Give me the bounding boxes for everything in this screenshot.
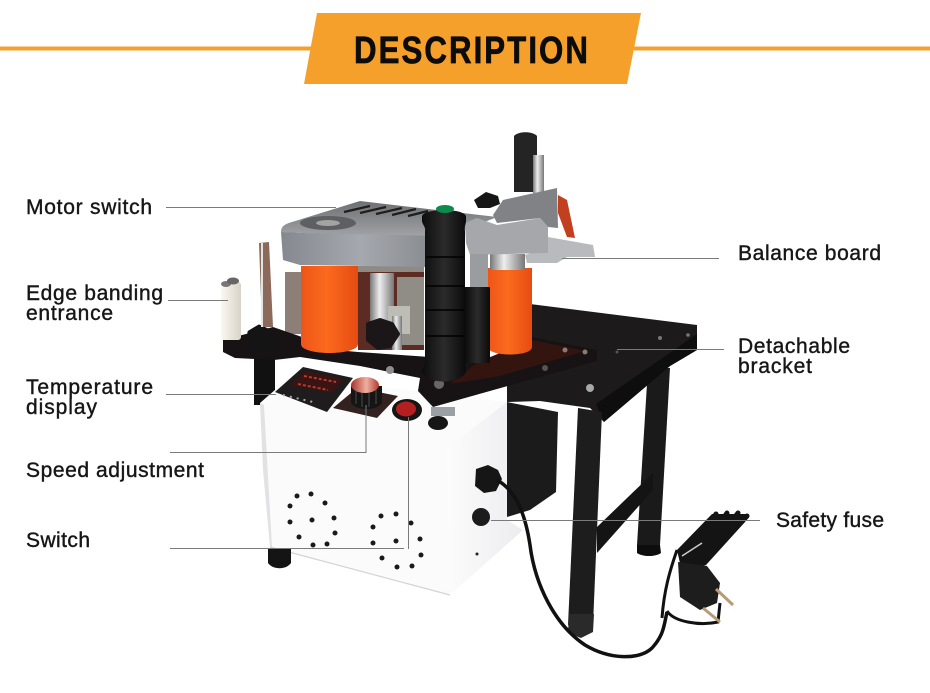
chrome spindle — [490, 254, 525, 270]
label: balance board: Balance board — [738, 242, 881, 265]
temperature display — [275, 367, 353, 412]
label: detachable bracket: bracket — [738, 355, 812, 378]
small top knob — [474, 192, 500, 208]
header rule left — [0, 46, 311, 50]
label: speed adjustment: Speed adjustment — [26, 459, 204, 482]
speed knob — [351, 377, 382, 409]
silver upper arm — [493, 188, 558, 228]
label: edge banding entrance — [26, 282, 163, 325]
safety fuse — [472, 508, 490, 526]
green button — [436, 205, 454, 213]
vent holes right — [370, 512, 424, 570]
star knob left — [248, 326, 275, 351]
left block — [285, 272, 303, 334]
box foot — [268, 549, 291, 568]
header rule right — [634, 46, 930, 50]
title banner — [304, 13, 641, 84]
star knob centre — [368, 320, 398, 348]
red lever — [558, 195, 575, 238]
guide rod — [259, 242, 273, 327]
vent holes left — [288, 492, 338, 548]
edge banding machine photo illustration — [221, 132, 747, 657]
leader lines — [166, 208, 760, 549]
label: detachable bracket — [738, 335, 850, 378]
grey column — [470, 254, 488, 287]
power cord — [497, 480, 667, 657]
right orange roller — [488, 268, 532, 354]
electrical box — [260, 376, 523, 595]
top handle — [514, 132, 544, 193]
small indicator and bolt — [428, 407, 455, 430]
label: switch: Switch — [26, 529, 90, 552]
power switch — [392, 399, 422, 421]
silver arm — [465, 218, 548, 255]
label: edge banding entrance: Edge banding — [26, 282, 163, 305]
base plate — [223, 327, 597, 407]
front grip — [422, 205, 466, 382]
left orange roller — [301, 266, 358, 353]
middle mechanism — [358, 266, 424, 350]
label: safety fuse: Safety fuse — [776, 509, 884, 532]
table — [507, 304, 697, 638]
speed knob panel — [333, 388, 398, 418]
label: edge banding entrance: entrance — [26, 302, 113, 325]
title banner: DESCRIPTION — [354, 30, 590, 72]
label: temperature display: display — [26, 396, 98, 419]
label: detachable bracket: Detachable — [738, 335, 850, 358]
label: temperature display: Temperature — [26, 376, 153, 399]
cable gland — [475, 465, 502, 493]
label: motor switch: Motor switch — [26, 196, 152, 219]
label: temperature display — [26, 376, 153, 419]
white roller — [221, 278, 241, 340]
coiled cord and plug — [662, 513, 747, 624]
top cover — [281, 201, 497, 268]
balance board — [525, 237, 595, 263]
rear left leg — [254, 355, 275, 405]
motor — [507, 402, 558, 517]
second black tube — [465, 287, 490, 363]
